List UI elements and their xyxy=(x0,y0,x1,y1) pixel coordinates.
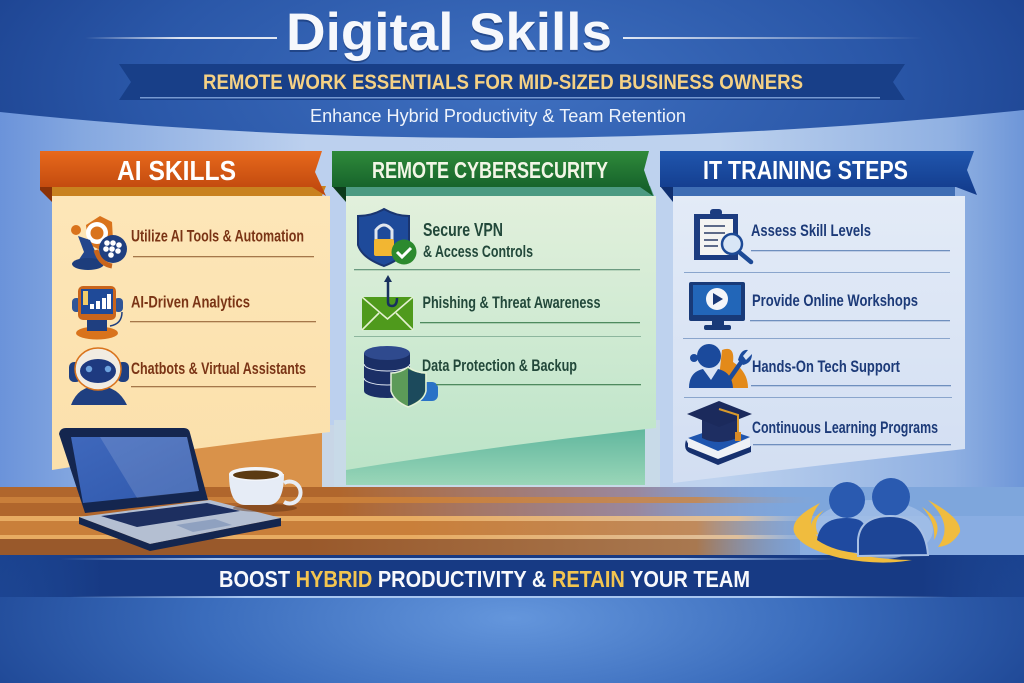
heading: IT training steps xyxy=(660,151,977,195)
tagline: Enhance Hybrid Productivity & Team Retention xyxy=(310,106,686,126)
team icon xyxy=(794,478,960,563)
panel: remote cybersecurity xyxy=(332,151,660,487)
icon: chatbot xyxy=(69,348,129,405)
icon: database shield xyxy=(364,346,438,407)
coffee cup xyxy=(229,467,301,512)
icon: clipboard and magnifier xyxy=(694,209,751,262)
text: phishing: Phishing & Threat Awareness xyxy=(422,293,600,312)
panel: IT training steps xyxy=(660,151,977,483)
footer ribbon xyxy=(0,555,1024,683)
text: data protection: Data Protection & Backup xyxy=(422,356,577,375)
icon: analytics xyxy=(72,286,123,340)
text: VPN xyxy=(423,219,533,261)
subtitle ribbon: REMOTE WORK ESSENTIALS FOR MID-SIZED BUSINESS OWNERS xyxy=(203,71,803,94)
panel: AI skills xyxy=(40,151,334,487)
icon: monitor with play xyxy=(689,282,745,330)
heading: AI skills xyxy=(40,151,326,196)
heading: remote cybersecurity: REMOTE CYBERSECURITY xyxy=(372,157,608,183)
text: AI tools: Utilize AI Tools & Automation xyxy=(131,226,304,246)
desk xyxy=(0,487,1024,555)
laptop xyxy=(59,428,281,551)
text: chatbots: Chatbots & Virtual Assistants xyxy=(131,359,306,378)
icon: tech support xyxy=(689,344,752,388)
heading: AI skills: AI SKILLS xyxy=(117,155,236,186)
icon: graduation cap and books xyxy=(685,401,752,465)
text: assess: Assess Skill Levels xyxy=(751,221,871,240)
title: Digital Skills xyxy=(286,5,612,64)
icon: phishing envelope xyxy=(362,275,413,330)
title xyxy=(85,3,923,64)
text: workshops: Provide Online Workshops xyxy=(752,291,918,310)
heading: IT training steps: IT TRAINING STEPS xyxy=(703,155,908,185)
icon: AI tools xyxy=(71,216,127,270)
subtitle ribbon xyxy=(119,64,905,100)
title: Digital Skills xyxy=(286,3,612,62)
icon: shield and lock xyxy=(358,209,416,266)
text: VPN: & Access Controls xyxy=(423,243,533,261)
text: support: Hands-On Tech Support xyxy=(752,357,900,376)
text: continuous learning: Continuous Learning Programs xyxy=(752,419,938,437)
text: analytics: AI-Driven Analytics xyxy=(131,292,250,312)
footer text: BOOST HYBRID PRODUCTIVITY & RETAIN YOUR TEAM xyxy=(219,566,750,592)
text: VPN: Secure VPN xyxy=(423,219,503,240)
heading: remote cybersecurity xyxy=(332,151,653,196)
